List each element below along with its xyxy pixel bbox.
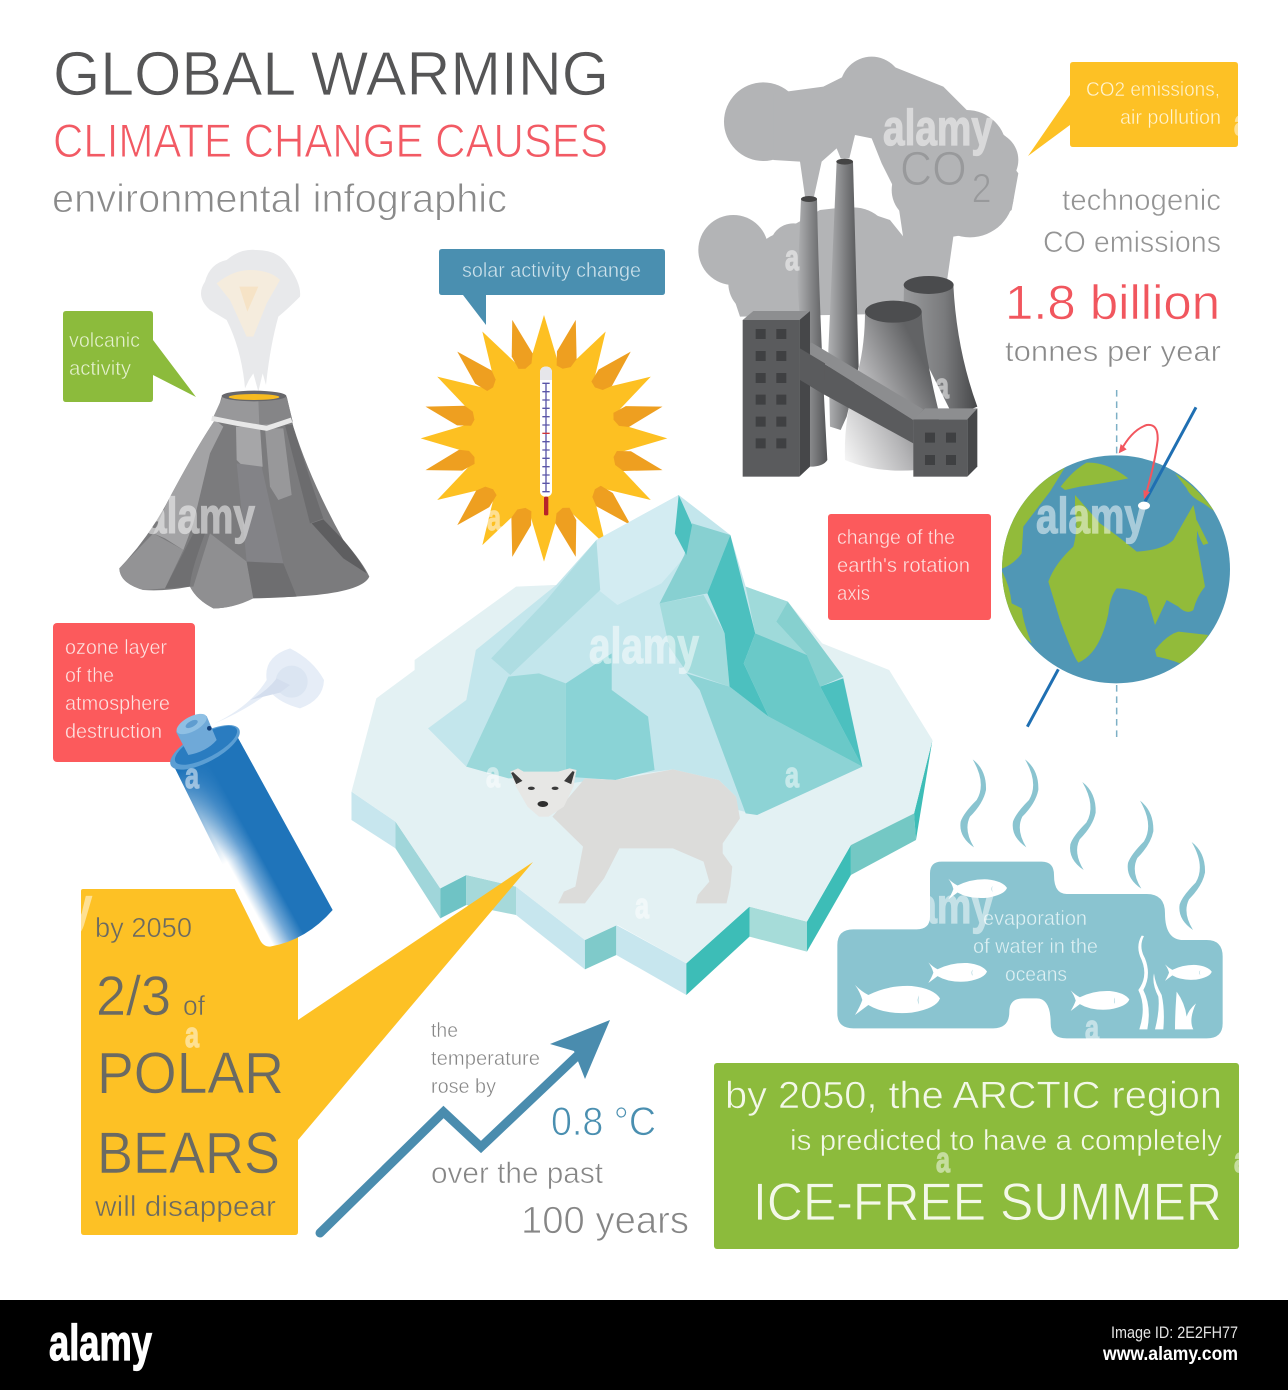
thermometer — [540, 367, 552, 515]
callout: polar bears: POLAR — [97, 1041, 284, 1106]
CO2 label: CO — [900, 143, 967, 196]
callout: earth's rotation axis — [828, 514, 991, 620]
icon: spray can — [164, 648, 333, 947]
callout: ice-free summer — [714, 1063, 1239, 1249]
icon: evaporation from ocean — [837, 759, 1223, 1038]
text: temperature stat: 0.8 °C — [551, 1100, 656, 1144]
callout: ice-free summer: ICE-FREE SUMMER — [753, 1173, 1222, 1232]
text: temperature stat: the — [431, 1020, 458, 1042]
callout: earth's rotation axis: change of the — [837, 527, 955, 549]
water body — [837, 862, 1223, 1038]
text: temperature stat: over the past — [431, 1157, 604, 1190]
callout: volcanic activity — [63, 311, 196, 402]
watermarks — [0, 100, 1249, 1180]
watermarks: a — [635, 885, 650, 926]
callout: ozone layer destruction: ozone layer — [65, 637, 167, 659]
text: evaporation of water: oceans — [1005, 964, 1067, 986]
watermarks: a — [1234, 102, 1249, 143]
watermarks: alamy — [145, 488, 255, 544]
cooling towers — [845, 276, 977, 471]
text: temperature stat: temperature — [431, 1048, 540, 1070]
rotation axis — [1027, 407, 1196, 727]
callout: solar activity change: solar activity change — [462, 260, 641, 282]
steam waves — [960, 759, 1205, 930]
callout: polar bears: by 2050 — [95, 912, 192, 943]
callout: ice-free summer: by 2050, the ARCTIC region — [725, 1075, 1222, 1117]
right building — [913, 408, 977, 477]
title: GLOBAL WARMING — [53, 40, 609, 109]
CO2 label: 2 — [972, 164, 992, 211]
watermarks: alamy — [589, 618, 699, 674]
title: environmental infographic — [52, 177, 507, 221]
icon: globe with tilted axis — [990, 390, 1230, 740]
callout: polar bears: of — [183, 990, 205, 1021]
stat: CO emissions — [1005, 184, 1221, 368]
illustration: iceberg with polar bear — [351, 495, 932, 995]
watermarks: a — [785, 754, 800, 795]
callout: CO2 emissions — [1028, 62, 1238, 156]
CO2 label — [900, 143, 992, 211]
footer bar: alamy — [49, 1315, 152, 1371]
text: evaporation of water: evaporation — [983, 908, 1087, 930]
smoke clouds — [698, 57, 1018, 317]
ice floe side faces — [351, 740, 932, 995]
stat: CO emissions: 1.8 billion — [1005, 277, 1220, 330]
watermarks: alamy — [1036, 488, 1146, 544]
ice floe top — [351, 585, 932, 963]
watermarks: a — [785, 237, 800, 278]
continents — [990, 463, 1215, 663]
conveyor — [800, 343, 923, 443]
footer bar: Image ID: 2E2FH77 — [1111, 1323, 1238, 1342]
watermarks: a — [1234, 1139, 1249, 1180]
fish — [855, 879, 1212, 1015]
footer bar: www.alamy.com — [1102, 1344, 1238, 1365]
watermarks: a — [487, 497, 502, 538]
iceberg faces — [428, 495, 862, 815]
watermarks: alamy — [883, 100, 993, 156]
callout: polar bears: BEARS — [97, 1121, 280, 1186]
icon: factory with smoke — [698, 57, 1018, 477]
callout: polar bears: will disappear — [94, 1191, 276, 1223]
callout: CO2 emissions: air pollution — [1120, 107, 1221, 129]
watermarks: a — [486, 754, 501, 795]
watermarks: a — [936, 1139, 951, 1180]
callout: ozone layer destruction: of the — [65, 665, 114, 687]
title — [52, 40, 609, 221]
callout: ozone layer destruction — [53, 623, 195, 762]
callout: ice-free summer: is predicted to have a completely — [790, 1125, 1223, 1157]
seaweed — [1138, 936, 1196, 1029]
text: evaporation of water — [973, 908, 1098, 986]
callout: CO2 emissions: CO2 emissions, — [1086, 79, 1220, 101]
callout: polar bears: 2/3 — [96, 964, 171, 1027]
watermarks: a — [185, 755, 200, 796]
callout: volcanic activity: volcanic — [69, 330, 140, 352]
stat: CO emissions: CO emissions — [1043, 226, 1221, 259]
text: evaporation of water: of water in the — [973, 936, 1098, 958]
text: temperature stat: 100 years — [521, 1200, 689, 1242]
eruption plume — [201, 250, 300, 392]
text: temperature stat — [431, 1020, 689, 1242]
axis shift arrow — [1119, 425, 1158, 499]
watermarks: alamy — [883, 878, 993, 934]
icon: sun with thermometer — [421, 315, 667, 562]
watermarks: a — [935, 365, 950, 406]
callout: earth's rotation axis: earth's rotation — [837, 555, 970, 577]
text: temperature stat: rose by — [431, 1076, 496, 1098]
arrow: temperature rise — [320, 1020, 610, 1233]
callout: polar bears — [81, 862, 533, 1235]
polar bear — [510, 768, 740, 903]
spray cloud — [213, 648, 324, 724]
footer bar — [0, 1300, 1288, 1390]
callout: solar activity change — [439, 249, 665, 325]
chimneys — [797, 159, 859, 467]
title: CLIMATE CHANGE CAUSES — [53, 114, 608, 167]
watermarks: a — [185, 1014, 200, 1055]
icon: volcano — [119, 250, 369, 608]
left building — [743, 311, 825, 477]
stat: CO emissions: technogenic — [1062, 184, 1221, 217]
callout: ozone layer destruction: atmosphere — [65, 693, 170, 715]
callout: ozone layer destruction: destruction — [65, 721, 162, 743]
callout: volcanic activity: activity — [69, 358, 131, 380]
callout: earth's rotation axis: axis — [837, 583, 870, 605]
watermarks: a — [1085, 1007, 1100, 1048]
stat: CO emissions: tonnes per year — [1005, 336, 1221, 368]
